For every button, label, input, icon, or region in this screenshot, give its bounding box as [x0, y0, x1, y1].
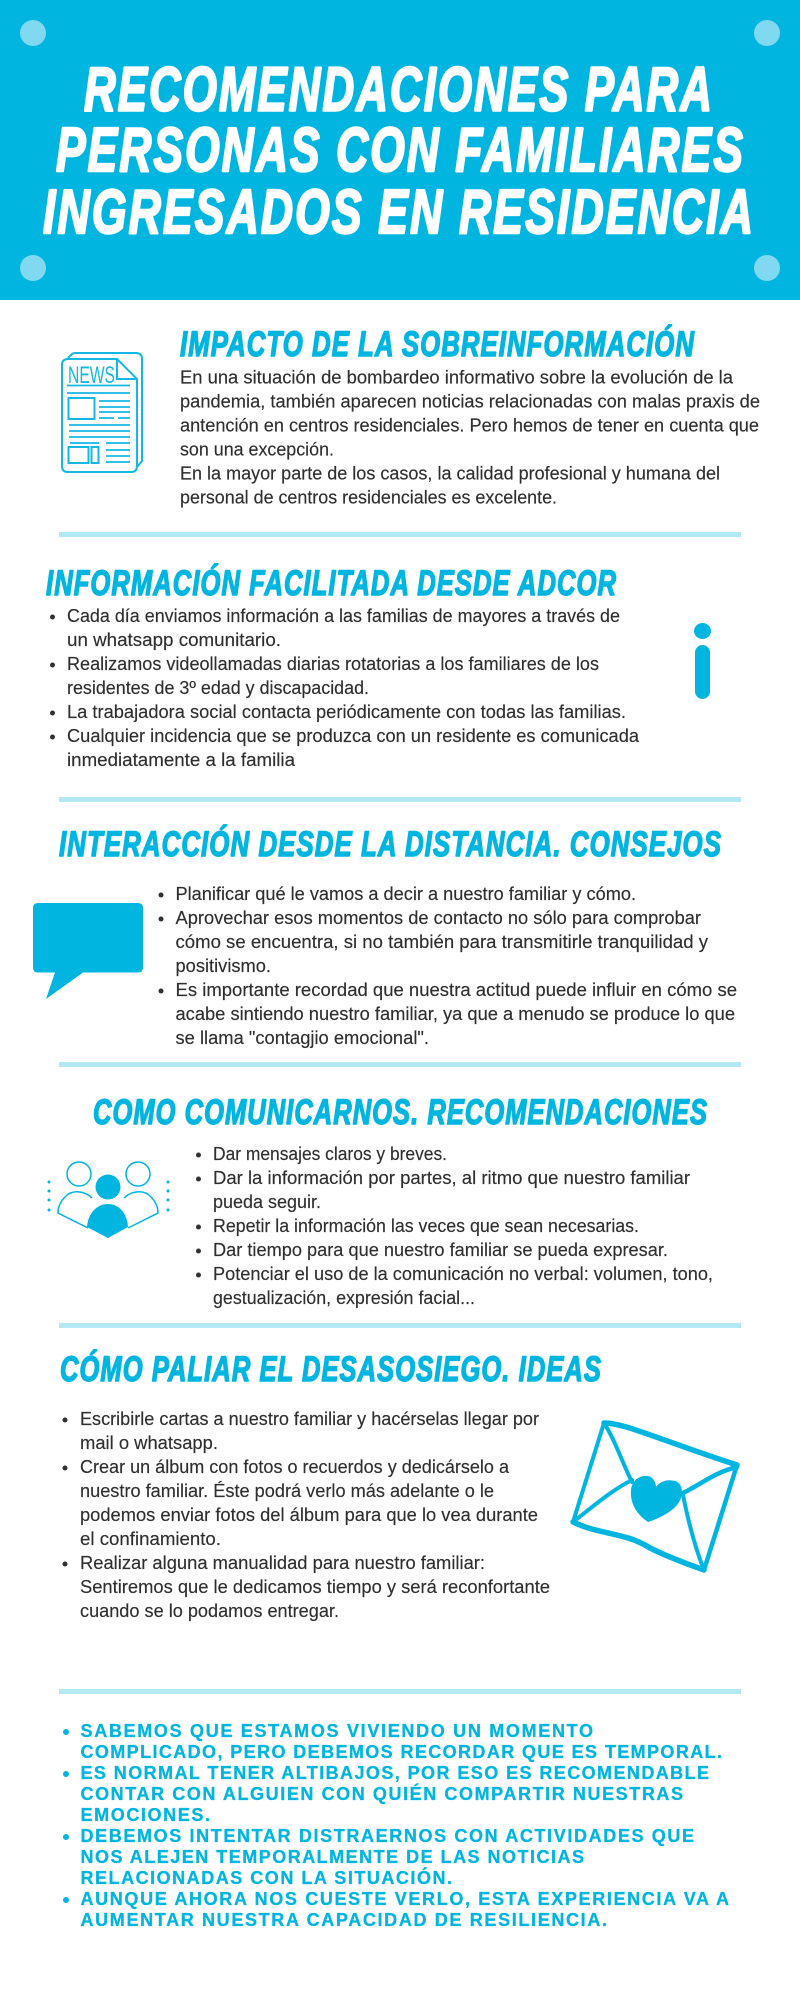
list: consejos: cómo se encuentra, si no también para transmitirle tranquilidad y	[176, 931, 709, 952]
icon: newspaper	[62, 353, 142, 472]
panel: mensajes finales	[63, 1721, 729, 1930]
list: información: residentes de 3º edad y discapacidad.	[67, 677, 369, 698]
panel: mensajes finales: SABEMOS QUE ESTAMOS VIVIENDO UN MOMENTO	[80, 1721, 593, 1741]
list: recomendaciones: Potenciar el uso de la comunicación no verbal: volumen, tono,	[213, 1263, 713, 1284]
list: ideas: el confinamiento.	[80, 1528, 221, 1549]
list: consejos: Aprovechar esos momentos de contacto no sólo para comprobar	[176, 907, 701, 928]
text block: impacto: antención en centros residenciales. Pero hemos de tener en cuenta que	[180, 414, 759, 436]
panel: header banner	[0, 0, 800, 300]
panel: mensajes finales: COMPLICADO, PERO DEBEMOS RECORDAR QUE ES TEMPORAL.	[80, 1742, 722, 1762]
panel: cómo paliar el desasosiego	[60, 1349, 737, 1621]
list: ideas: Escribirle cartas a nuestro familiar y hacérselas llegar por	[80, 1408, 539, 1429]
list: ideas	[62, 1408, 550, 1621]
panel: mensajes finales: DEBEMOS INTENTAR DISTRAERNOS CON ACTIVIDADES QUE	[80, 1826, 694, 1846]
icon: group of people	[48, 1162, 170, 1238]
list: ideas: podemos enviar fotos del álbum para que lo vea durante	[80, 1504, 538, 1525]
text block: impacto: pandemia, también aparecen noticias relacionadas con malas praxis de	[180, 390, 760, 412]
list: recomendaciones: Dar tiempo para que nuestro familiar se pueda expresar.	[213, 1239, 668, 1260]
panel: mensajes finales: RELACIONADAS CON LA SITUACIÓN.	[80, 1867, 452, 1888]
list: información	[50, 605, 640, 770]
list: recomendaciones: Dar mensajes claros y breves.	[213, 1143, 447, 1164]
list: consejos	[158, 883, 737, 1048]
panel: mensajes finales: AUNQUE AHORA NOS CUESTE VERLO, ESTA EXPERIENCIA VA A	[80, 1889, 729, 1909]
panel: mensajes finales: EMOCIONES.	[80, 1805, 210, 1825]
list: ideas: Crear un álbum con fotos o recuerdos y dedicárselo a	[80, 1456, 510, 1477]
icon: speech bubble	[33, 903, 143, 999]
panel: cómo comunicarnos	[48, 1093, 713, 1308]
panel: impacto de la sobreinformación	[62, 324, 760, 508]
panel: mensajes finales: CONTAR CON ALGUIEN CON QUIÉN COMPARTIR NUESTRAS	[80, 1783, 683, 1804]
list: ideas: mail o whatsapp.	[80, 1432, 218, 1453]
list: consejos: Es importante recordad que nuestra actitud puede influir en cómo se	[176, 979, 737, 1000]
panel: mensajes finales: ES NORMAL TENER ALTIBAJOS, POR ESO ES RECOMENDABLE	[80, 1763, 709, 1783]
heading: desasosiego: CÓMO PALIAR EL DESASOSIEGO. IDEAS	[60, 1349, 602, 1389]
title	[43, 56, 755, 247]
list: recomendaciones: Dar la información por partes, al ritmo que nuestro familiar	[213, 1167, 690, 1188]
text block: impacto: En la mayor parte de los casos, la calidad profesional y humana del	[180, 462, 720, 484]
list: consejos: positivismo.	[176, 955, 271, 976]
list: información: Realizamos videollamadas diarias rotatorias a los familiares de los	[67, 653, 599, 674]
list: ideas: nuestro familiar. Éste podrá verlo más adelante o le	[80, 1480, 494, 1501]
text block: impacto: son una excepción.	[180, 438, 334, 460]
text block: impacto	[180, 366, 760, 508]
list: información: Cualquier incidencia que se produzca con un residente es comunicada	[67, 725, 640, 746]
list: recomendaciones	[196, 1143, 713, 1308]
list: consejos: se llama "contagjio emocional".	[176, 1027, 429, 1048]
panel: información facilitada	[46, 563, 711, 770]
list: información: un whatsapp comunitario.	[67, 629, 281, 650]
text block: impacto: En una situación de bombardeo informativo sobre la evolución de la	[180, 366, 734, 388]
list: recomendaciones: Repetir la información las veces que sean necesarias.	[213, 1215, 639, 1236]
list: recomendaciones: pueda seguir.	[213, 1191, 321, 1212]
list: información: La trabajadora social contacta periódicamente con todas las familias.	[67, 701, 626, 722]
text block: impacto: personal de centros residenciales es excelente.	[180, 486, 557, 508]
panel: interacción desde la distancia	[33, 824, 737, 1048]
list: ideas: cuando se lo podamos entregar.	[80, 1600, 339, 1621]
panel: mensajes finales: NOS ALEJEN TEMPORALMENTE DE LAS NOTICIAS	[80, 1847, 584, 1867]
icon: information i	[694, 623, 711, 699]
list: ideas: Realizar alguna manualidad para nuestro familiar:	[80, 1552, 485, 1573]
list: recomendaciones: gestualización, expresión facial...	[213, 1287, 475, 1308]
icon: envelope with heart	[573, 1423, 737, 1570]
list: información: Cada día enviamos información a las familias de mayores a través de	[67, 605, 620, 626]
list: consejos: acabe sintiendo nuestro familiar, ya que a menudo se produce lo que	[176, 1003, 735, 1024]
list: consejos: Planificar qué le vamos a decir a nuestro familiar y cómo.	[176, 883, 636, 904]
list: ideas: Sentiremos que le dedicamos tiempo y será reconfortante	[80, 1576, 550, 1597]
list: información: inmediatamente a la familia	[67, 749, 296, 770]
icon: newspaper: NEWS	[68, 362, 115, 389]
panel: mensajes finales: AUMENTAR NUESTRA CAPACIDAD DE RESILIENCIA.	[80, 1910, 607, 1930]
